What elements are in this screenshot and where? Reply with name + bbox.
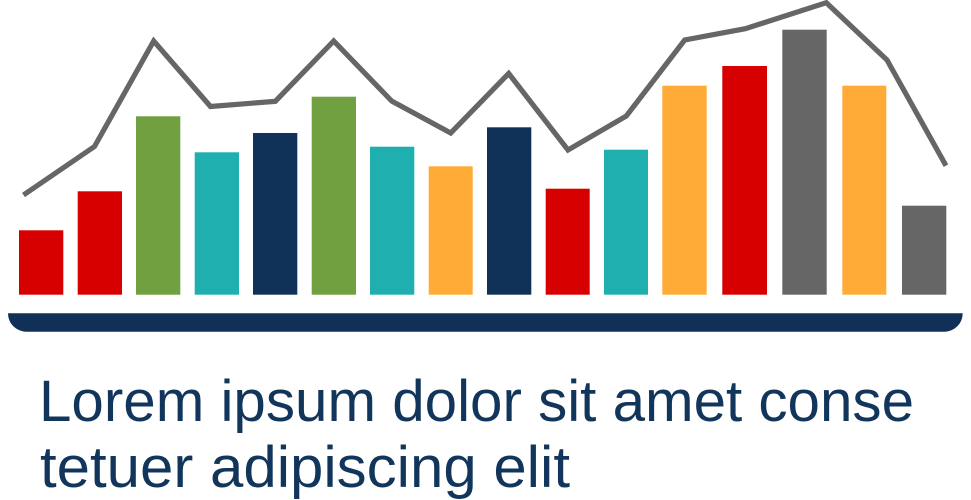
caption — [39, 369, 914, 500]
bar 11 — [604, 150, 648, 295]
bar 2 — [78, 191, 122, 295]
bar 16 — [902, 206, 946, 295]
bar 14 — [782, 30, 827, 295]
trend line — [24, 3, 946, 195]
bar 6 — [312, 97, 356, 295]
bar 5 — [253, 133, 297, 295]
bar 8 — [429, 166, 473, 295]
caption line 1: Lorem ipsum dolor sit amet conse — [39, 369, 914, 434]
bars — [19, 30, 946, 295]
bar 12 — [662, 86, 707, 295]
bar 9 — [487, 127, 531, 295]
bar 15 — [842, 86, 886, 295]
caption line 2: tetuer adipiscing elit — [40, 435, 570, 500]
bar 13 — [722, 66, 767, 295]
bar 7 — [370, 147, 414, 295]
bar 10 — [546, 189, 590, 295]
bar 4 — [195, 152, 239, 295]
bar 1 — [19, 230, 63, 295]
base platform — [8, 313, 963, 332]
bar 3 — [136, 116, 180, 295]
